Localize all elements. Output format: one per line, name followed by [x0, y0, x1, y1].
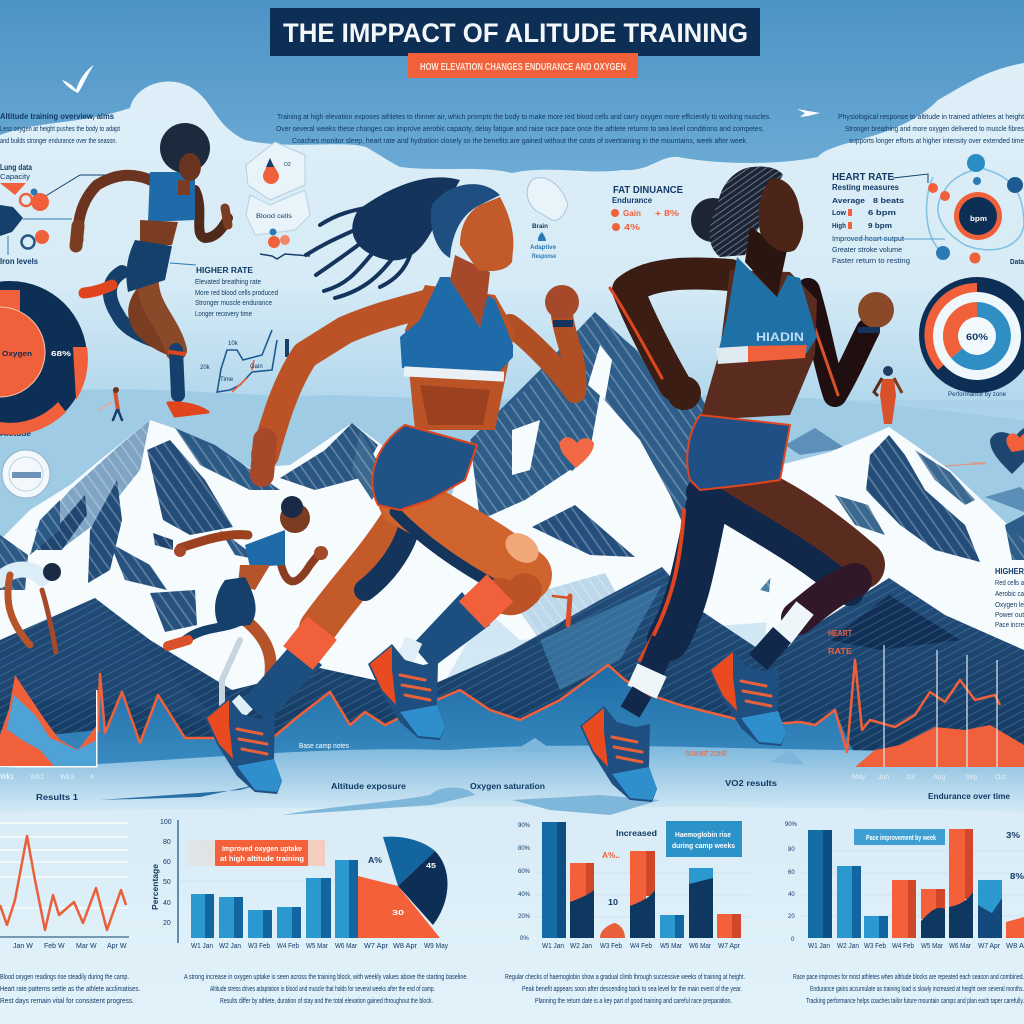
bar chart 4: 90%	[785, 822, 798, 828]
bar chart 3: 0%	[520, 936, 529, 942]
bar chart 4: W8 A	[1006, 943, 1024, 950]
bar chart 4	[785, 822, 1024, 950]
right area chart: RATE	[828, 647, 853, 656]
bar chart 1: line chart	[0, 823, 129, 950]
left area chart: Wk3	[60, 774, 74, 781]
title banner	[270, 8, 760, 56]
runner: right athlete	[580, 167, 894, 802]
bar chart 3: W4 Feb	[630, 943, 652, 950]
arms	[265, 302, 432, 455]
bar chart 3: W7 Apr	[718, 943, 741, 950]
left organ network: Lung data	[0, 163, 32, 172]
bottom captions: Rest days remain vital for consistent progress.	[0, 998, 134, 1005]
peak label text: Oxygen saturation	[470, 782, 545, 791]
bar chart 4: 40	[788, 892, 795, 898]
head diagram: Response	[532, 254, 557, 260]
oxygen drop diagram: O2	[284, 162, 291, 168]
bar chart 2 with pie: W1 Jan	[191, 943, 213, 950]
bottom captions	[0, 974, 1024, 1005]
bar chart 4: W7 Apr	[978, 943, 1001, 950]
clouds	[0, 63, 1024, 430]
left snowy mountain	[0, 420, 480, 760]
bar chart 4: W5 Mar	[921, 943, 944, 950]
bar chart 2 with pie: 60	[163, 859, 171, 866]
left organ network: Capacity	[0, 174, 31, 181]
right side text block	[995, 567, 1024, 629]
torso	[405, 285, 515, 430]
hair	[691, 167, 783, 257]
left donut chart: 68%	[51, 351, 72, 358]
right area chart: Oct	[995, 774, 1006, 781]
head diagram	[527, 178, 568, 260]
bar chart 4: 20	[788, 914, 795, 920]
left donut chart	[0, 281, 88, 435]
bottom captions: Regular checks of haemoglobin show a gradual climb through successive weeks of training at height.	[505, 974, 745, 981]
heart rate text: Faster return to resting	[832, 258, 910, 265]
right area chart: Jul	[906, 774, 915, 781]
bar chart 2 with pie: at high altitude training	[220, 856, 304, 863]
bar chart 4: 8%	[1010, 872, 1024, 881]
bar chart 3: 60%	[518, 869, 531, 875]
centre snowy mountain	[430, 312, 830, 640]
heart rate text: 9 bpm	[868, 223, 892, 230]
right area chart: Jun	[878, 774, 889, 781]
bar chart 2 with pie: A%	[368, 856, 382, 865]
blue hills under heart line	[0, 665, 860, 770]
dark foreground mountains	[0, 567, 1024, 770]
left organ network: Iron levels	[0, 257, 39, 266]
fatigue and endurance text: 4%	[624, 223, 640, 232]
bar chart 2 with pie: 50	[163, 879, 171, 886]
right donut chart	[919, 277, 1024, 398]
bottom captions: Results differ by athlete, duration of stay and the total elevation gained throughout the block.	[220, 998, 433, 1005]
bar chart 2 with pie: W6 Mar	[335, 943, 358, 950]
ground	[0, 746, 1024, 812]
right area chart: May	[852, 774, 866, 781]
small runner on slope	[99, 387, 122, 420]
circular node diagram: bpm	[970, 216, 987, 223]
ground ice shapes	[100, 738, 805, 815]
bar chart 3: W1 Jan	[542, 943, 564, 950]
heart rate text: Resting measures	[832, 183, 900, 192]
bottom captions: A strong increase in oxygen uptake is seen across the training block, with weekly values above the starting baseline.	[184, 974, 468, 981]
bar chart 3: 80%	[518, 846, 531, 852]
bar chart 2 with pie: Improved oxygen uptake	[222, 846, 302, 853]
head diagram: Brain	[532, 224, 548, 230]
circular node diagram	[850, 154, 1024, 266]
head diagram: Adaptive	[530, 245, 557, 251]
runner: centre athlete	[205, 177, 579, 794]
bottom captions: Altitude stress drives adaptation in blood and muscle that holds for several weeks after the end of camp.	[210, 986, 435, 993]
neck and head	[450, 255, 490, 326]
peak label text: Base camp notes	[299, 743, 349, 750]
bar chart 4: 0	[791, 937, 795, 943]
heart rate text: Greater stroke volume	[832, 247, 902, 254]
bar chart 4: W6 Mar	[949, 943, 972, 950]
bar chart 3: A%..	[602, 851, 620, 860]
bar chart 2 with pie: W3 Feb	[248, 943, 270, 950]
training text with line: Longer recovery time	[195, 311, 252, 318]
heart rate text: HEART RATE	[832, 172, 894, 183]
left donut chart: Oxygen	[2, 351, 32, 358]
right area chart: HEART	[828, 629, 852, 638]
intro text block left: Less oxygen at height pushes the body to adapt	[0, 126, 120, 133]
oxygen drop diagram: Blood cells	[256, 214, 292, 220]
small runner on summit	[874, 366, 902, 424]
intro text block centre: Over several weeks these changes can improve aerobic capacity, delay fatigue and raise race pace once the athlete returns to sea level conditions and competes.	[276, 126, 764, 133]
bar chart 2 with pie: W2 Jan	[219, 943, 241, 950]
bar chart 4: 3%	[1006, 831, 1020, 840]
intro text block left: and builds stronger endurance over the season.	[0, 138, 117, 145]
bar chart 3: 10	[608, 898, 619, 907]
bar chart 3: Increased	[616, 829, 657, 838]
skier figure on centre slope	[553, 596, 570, 630]
small zigzag line chart: 20k	[200, 365, 211, 371]
arms	[628, 274, 730, 385]
bar chart 2 with pie: 20	[163, 920, 171, 927]
peak label text: Endurance over time	[928, 792, 1011, 801]
small zigzag line chart	[200, 330, 289, 393]
right area chart: Aug	[933, 774, 946, 781]
peak label text	[0, 431, 1011, 802]
bar chart 3: during camp weeks	[672, 843, 735, 850]
bar chart 3: 40%	[518, 892, 531, 898]
intro text block centre: Coaches monitor sleep, heart rate and hydration closely so the benefits are gained without the costs of overtraining in the mountains, week after week.	[292, 138, 748, 145]
bar chart 2 with pie: 100	[160, 819, 172, 826]
left organ network	[0, 163, 108, 266]
heart rate text	[832, 172, 910, 265]
runner: top left athlete	[76, 123, 228, 416]
left area chart	[0, 675, 98, 781]
sky background	[0, 0, 1024, 420]
intro text block left	[0, 112, 120, 145]
bar chart 3: W2 Jan	[570, 943, 592, 950]
bar chart 1: line chart: Apr W	[107, 943, 127, 950]
shorts	[372, 425, 477, 510]
bar chart 3: 90%	[518, 823, 531, 829]
left area chart: 4	[90, 774, 94, 781]
intro text block right	[838, 114, 1024, 145]
bar chart 3: W6 Mar	[689, 943, 712, 950]
training text with line: HIGHER RATE	[196, 266, 254, 275]
front leg	[405, 500, 525, 575]
seal badge	[2, 450, 50, 498]
neck and head	[745, 227, 787, 297]
bar chart 4: Pace improvement by week	[866, 835, 936, 842]
training text with line	[170, 263, 278, 318]
bottom captions: Planning the return date is a key part of good training and careful race preparation.	[535, 998, 732, 1005]
hair	[306, 177, 460, 298]
lower backdrop	[0, 400, 1024, 1024]
bar chart 3: W3 Feb	[600, 943, 622, 950]
front shoe	[368, 644, 445, 740]
fatigue and endurance text	[611, 185, 683, 232]
subtitle ribbon: HOW ELEVATION CHANGES ENDURANCE AND OXYGEN	[420, 62, 626, 73]
bar chart 1: line chart: Jan W	[13, 943, 33, 950]
intro text block right: Physiological response to altitude in trained athletes at height	[838, 114, 1024, 121]
back leg	[318, 520, 400, 628]
title banner: THE IMPPACT OF ALITUDE TRAINING	[283, 18, 748, 48]
hearts	[560, 428, 1024, 474]
subtitle ribbon	[408, 53, 638, 78]
bar chart 2 with pie: W8 Apr	[393, 943, 418, 950]
back shoe	[205, 698, 282, 794]
heart rate text: Low	[832, 210, 847, 217]
training text with line: Elevated breathing rate	[195, 279, 261, 286]
bar chart 3	[518, 821, 750, 950]
heart rate text: 6 bpm	[868, 210, 896, 217]
right donut chart: Performance by zone	[948, 392, 1007, 398]
hearts: Cardio	[970, 461, 986, 467]
bar chart 4: W1 Jan	[808, 943, 830, 950]
bar chart 2 with pie: W4 Feb	[277, 943, 299, 950]
bar chart 4: 60	[788, 870, 795, 876]
bar chart 2 with pie	[151, 819, 448, 950]
bar chart 2 with pie: W5 Mar	[306, 943, 329, 950]
right snowy mountain	[760, 427, 1024, 700]
distant ridge	[0, 389, 1024, 540]
heart rate text: Average	[832, 198, 865, 205]
bar chart 3: 20%	[518, 914, 531, 920]
bar chart 4: W4 Feb	[892, 943, 914, 950]
peak label text: SUMMIT ZONE	[685, 751, 727, 758]
fatigue and endurance text: Gain	[623, 209, 641, 218]
fatigue and endurance text: FAT DINUANCE	[613, 185, 683, 196]
intro text block centre: Training at high elevation exposes athletes to thinner air, which prompts the body to make more red blood cells and carry oxygen more efficiently to working muscles.	[277, 114, 771, 121]
bottom captions: Blood oxygen readings rise steadily during the camp.	[0, 974, 129, 981]
peak label text: Altitude	[0, 431, 31, 438]
right area chart	[828, 629, 1024, 781]
bar chart 3: W5 Mar	[660, 943, 683, 950]
heart rate text: Improved heart output	[832, 236, 904, 243]
runner: small centre-left athlete	[168, 496, 328, 705]
heart rate text: 8 beats	[873, 198, 904, 205]
small background peak	[785, 428, 845, 455]
bar chart 2 with pie: 30	[392, 910, 404, 917]
bar chart 1: line chart: Feb W	[44, 943, 65, 950]
oxygen drop diagram	[246, 142, 310, 259]
front shoe	[709, 650, 786, 746]
small zigzag line chart: Gain	[250, 364, 263, 370]
small zigzag line chart: Time	[220, 377, 234, 383]
bar chart 4: 80	[788, 847, 795, 853]
birds	[62, 65, 820, 117]
peak label text: Results 1	[36, 793, 79, 802]
bar chart 3: Haemoglobin rise	[675, 832, 731, 839]
left area chart: Wk1	[0, 774, 14, 781]
small zigzag line chart: 10k	[228, 341, 239, 347]
bar chart 2 with pie: W9 May	[424, 943, 448, 950]
heart rate text: High	[832, 223, 846, 230]
bar chart 1: line chart: Mar W	[76, 943, 97, 950]
bar chart 4: W2 Jan	[837, 943, 859, 950]
right area chart: Sep	[965, 774, 978, 781]
bar chart 4: W3 Feb	[864, 943, 886, 950]
bar chart 2 with pie: 40	[163, 900, 171, 907]
bar chart 2 with pie: W7 Apr	[364, 943, 389, 950]
shorts	[687, 415, 790, 490]
bottom captions: Peak benefit appears soon after descending back to sea level for the main event of the year.	[522, 986, 742, 993]
runner: right athlete: HIADIN	[756, 330, 804, 344]
peak label text: VO2 results	[725, 779, 778, 788]
bar chart 2 with pie: 80	[163, 839, 171, 846]
heart rate line	[98, 660, 1000, 752]
intro text block centre	[276, 114, 771, 145]
front leg	[715, 480, 860, 565]
back shoe	[580, 706, 657, 802]
bottom captions: Heart rate patterns settle as the athlete acclimatises.	[0, 986, 140, 993]
right donut chart: 60%	[966, 332, 988, 342]
bar chart 2 with pie: 45	[426, 863, 436, 870]
fatigue and endurance text: Endurance	[612, 196, 653, 205]
training text with line: More red blood cells produced	[195, 290, 278, 297]
fatigue and endurance text: + 8%	[655, 209, 679, 218]
training text with line: Stronger muscle endurance	[195, 300, 272, 307]
intro text block left: Altitude training overview, aims	[0, 112, 115, 121]
bar chart 2 with pie: Percentage	[151, 863, 160, 910]
left area chart: Wk2	[30, 774, 44, 781]
torso	[700, 270, 817, 420]
back leg	[668, 500, 708, 640]
peak label text: Altitude exposure	[331, 782, 407, 791]
runner: small bent figure left	[0, 563, 61, 652]
